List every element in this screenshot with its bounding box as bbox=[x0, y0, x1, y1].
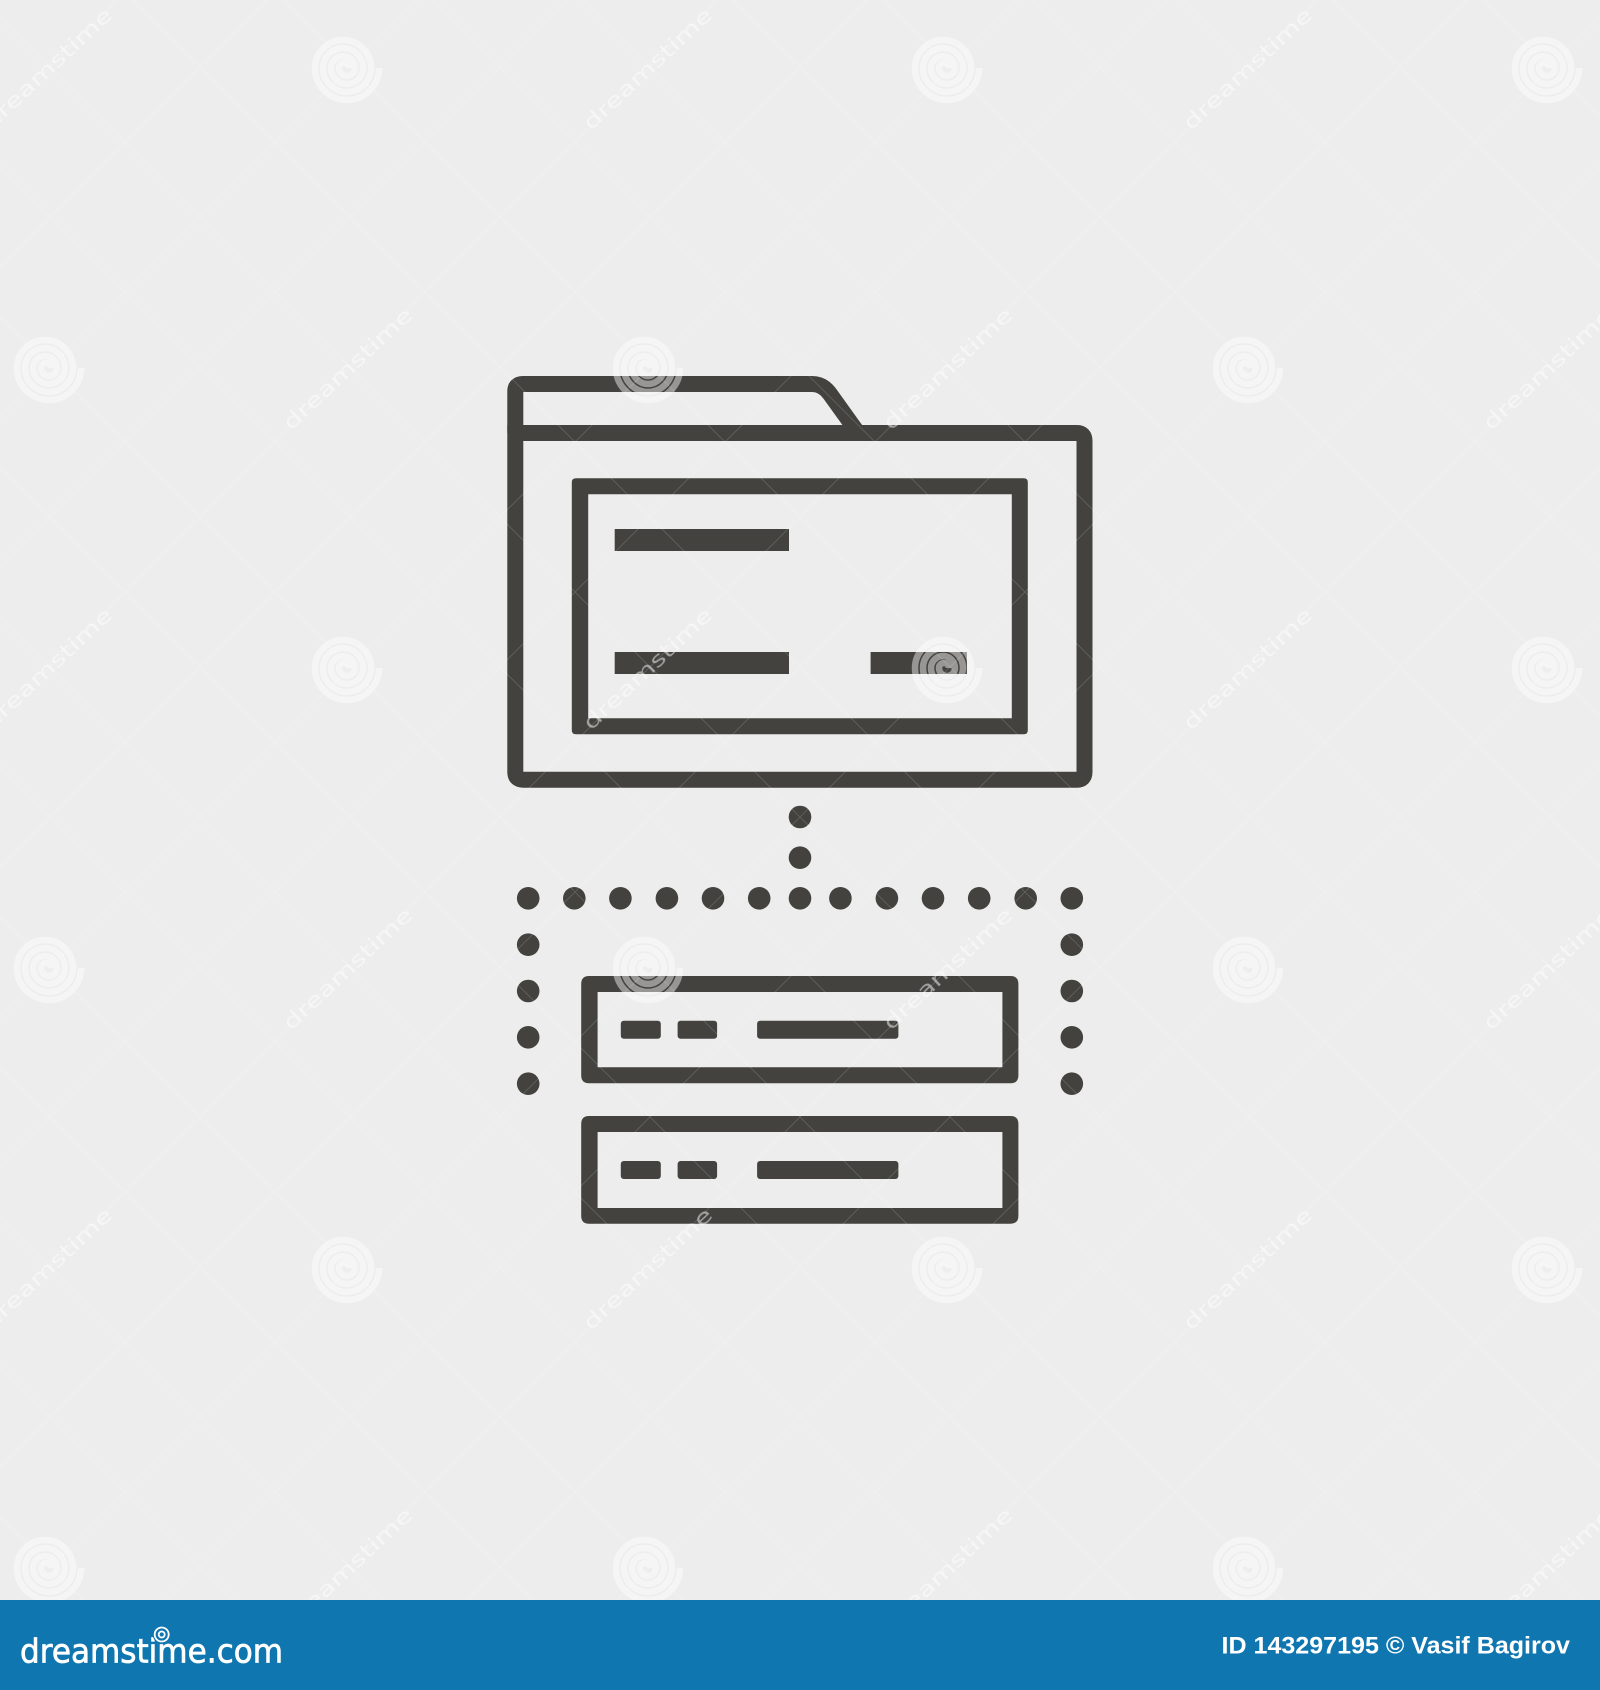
dotted connector bbox=[517, 806, 1083, 1095]
watermark text: dreamstime bbox=[878, 903, 1017, 1035]
document line 2 bbox=[615, 652, 789, 674]
watermark text: dreamstime bbox=[578, 1203, 717, 1335]
watermark text: dreamstime bbox=[1478, 1503, 1600, 1635]
watermark text: dreamstime bbox=[1178, 603, 1317, 735]
watermark text: dreamstime bbox=[878, 1503, 1017, 1635]
watermark text: dreamstime bbox=[878, 303, 1017, 435]
folder tab bbox=[515, 384, 858, 433]
watermark text: dreamstime bbox=[1178, 1203, 1317, 1335]
document inside folder bbox=[572, 478, 1028, 734]
watermark text: dreamstime bbox=[578, 603, 717, 735]
icon: folder bbox=[515, 384, 1084, 780]
watermark text: dreamstime bbox=[1178, 3, 1317, 135]
watermark text: dreamstime bbox=[278, 303, 417, 435]
icon: server 2 bbox=[581, 1116, 1018, 1224]
watermark text: dreamstime bbox=[278, 903, 417, 1035]
document line 3 bbox=[871, 652, 967, 674]
watermark text: dreamstime bbox=[578, 3, 717, 135]
footer bar bbox=[0, 1600, 1600, 1690]
watermark text: dreamstime bbox=[1478, 303, 1600, 435]
watermark text: dreamstime bbox=[278, 1503, 417, 1635]
icon: server 1 bbox=[581, 976, 1018, 1083]
document line 1 bbox=[615, 529, 789, 551]
watermark text: dreamstime bbox=[1478, 903, 1600, 1035]
footer image credit: ID 143297195 © Vasif Bagirov bbox=[1222, 1632, 1571, 1659]
footer logo text: dreamstime.com bbox=[20, 1632, 283, 1670]
footer logo spiral bbox=[153, 1626, 171, 1644]
folder body bbox=[515, 433, 1084, 780]
